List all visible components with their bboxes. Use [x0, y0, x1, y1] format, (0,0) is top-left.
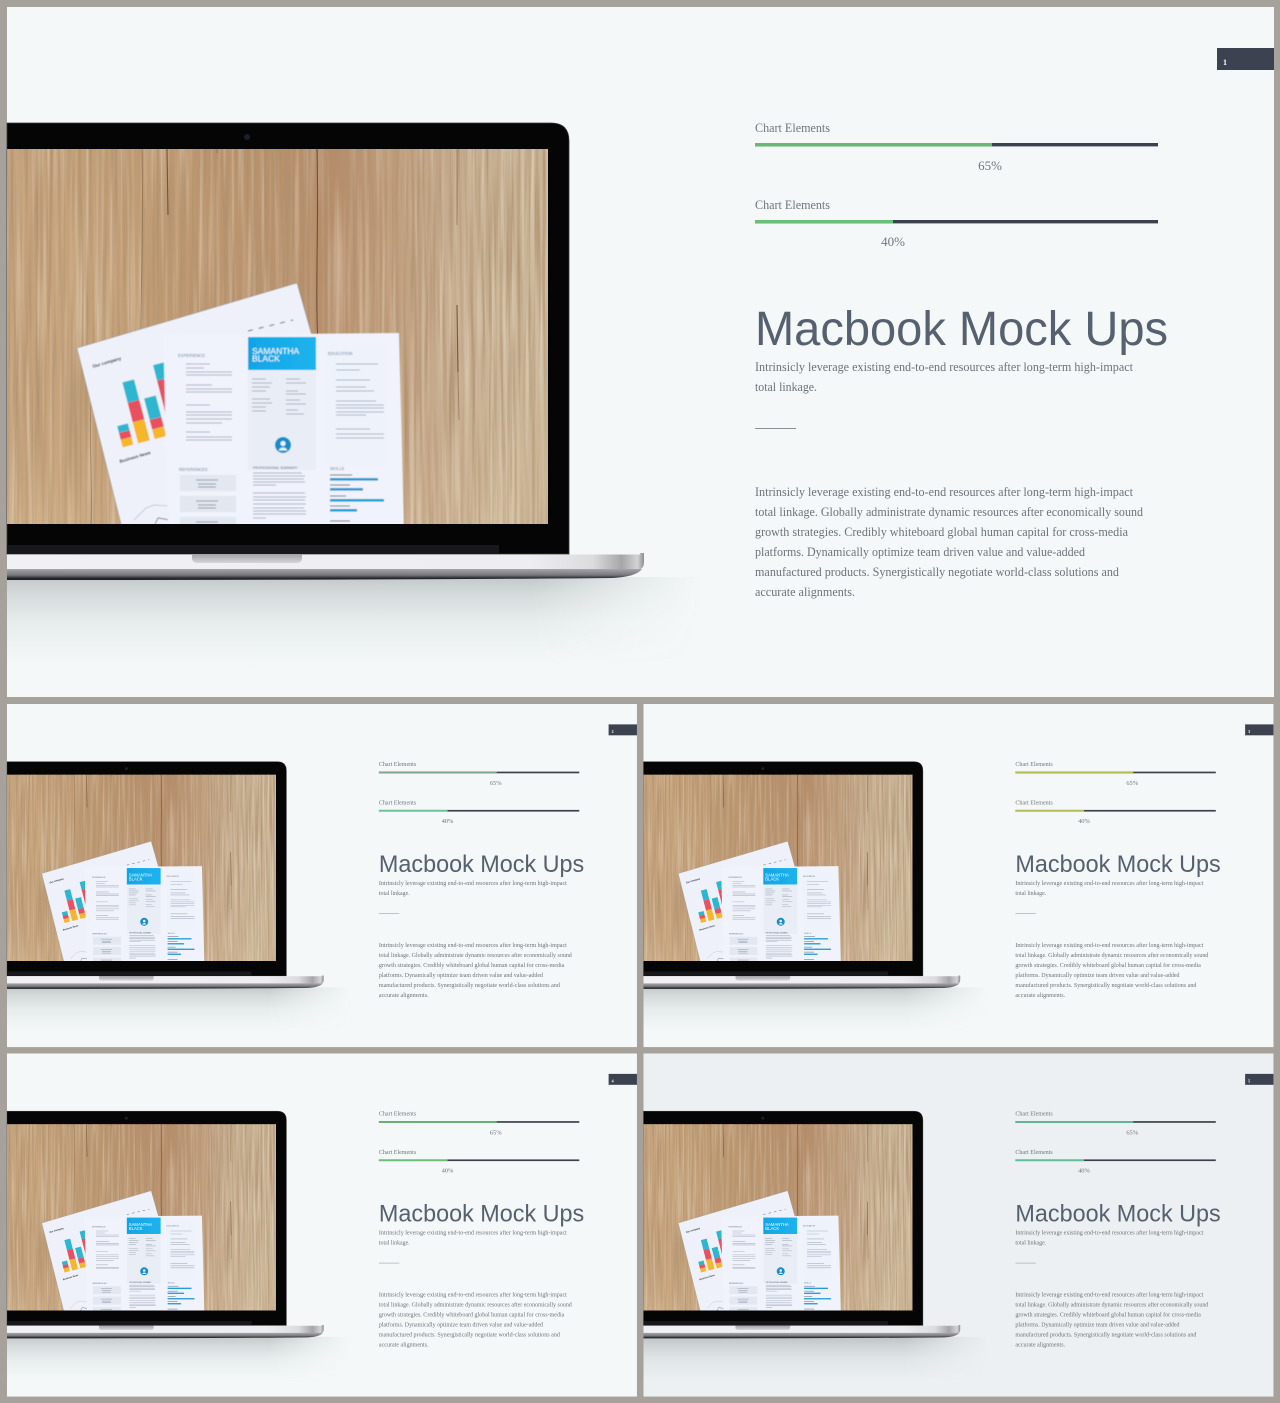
laptop mockup	[7, 123, 707, 667]
title: Macbook Mock Ups	[379, 851, 584, 878]
body text: manufactured products. Synergistically negotiate world-class solutions and	[1015, 1331, 1197, 1338]
chart element 1: 65%	[1126, 780, 1139, 787]
chart element 1: Chart Elements	[1015, 761, 1053, 768]
title: Macbook Mock Ups	[1015, 851, 1221, 878]
body text: accurate alignments.	[1015, 1341, 1066, 1348]
body text: platforms. Dynamically optimize team driven value and value-added	[755, 545, 1086, 559]
body text: manufactured products. Synergistically negotiate world-class solutions and	[379, 982, 561, 989]
chart element 1: Chart Elements	[379, 1111, 417, 1118]
chart element 2	[379, 1149, 579, 1174]
slide 5 background	[644, 1054, 1273, 1397]
slide 1: large main slide	[7, 7, 1274, 697]
slide 3 background	[644, 704, 1273, 1047]
subtitle	[379, 880, 567, 897]
subtitle: Intrinsicly leverage existing end-to-end resources after long-term high-impact	[1015, 880, 1204, 887]
subtitle: total linkage.	[1015, 890, 1047, 897]
slide number tag	[609, 724, 637, 735]
chart element 2	[1015, 1149, 1216, 1174]
back paper with charts: Business News	[119, 450, 152, 464]
front resume paper: EDUCATION	[328, 351, 352, 356]
body text: platforms. Dynamically optimize team driven value and value-added	[1015, 1321, 1180, 1328]
body text: growth strategies. Credibly whiteboard global human capital for cross-media	[379, 962, 565, 969]
body text	[1015, 942, 1209, 999]
body text: growth strategies. Credibly whiteboard global human capital for cross-media	[755, 525, 1128, 539]
front resume paper: BLACK	[252, 354, 280, 364]
chart element 2: 40%	[1078, 818, 1091, 825]
slide number tag	[609, 1074, 637, 1085]
slide 2 background	[7, 704, 637, 1047]
slide number tag: 5	[1248, 1078, 1250, 1083]
body text	[379, 942, 573, 999]
laptop mockup	[644, 1111, 992, 1382]
chart element 1: 65% progress bar	[755, 121, 1158, 173]
webcam	[244, 134, 250, 140]
chart element 2: Chart Elements	[379, 799, 417, 806]
resume text lines	[186, 364, 384, 518]
laptop shadow	[7, 577, 707, 667]
laptop lid	[7, 123, 569, 554]
resume header	[248, 337, 316, 370]
slide number tag	[1245, 1074, 1273, 1085]
subtitle	[1015, 1229, 1204, 1246]
laptop mockup	[7, 762, 355, 1032]
body text: growth strategies. Credibly whiteboard global human capital for cross-media	[1015, 962, 1201, 969]
chart element 2: 40% progress bar: 40%	[881, 234, 905, 249]
chart element 2: 40% progress bar	[755, 198, 1158, 249]
body text: manufactured products. Synergistically negotiate world-class solutions and	[379, 1331, 561, 1338]
stacked bar chart	[105, 362, 183, 447]
subtitle	[379, 1229, 567, 1246]
chart element 1: Chart Elements	[379, 761, 417, 768]
body text: accurate alignments.	[1015, 992, 1066, 999]
reference cards	[180, 475, 236, 491]
chart element 1	[1015, 761, 1216, 787]
slide number tag: 2	[612, 729, 614, 734]
chart element 1: 65% progress bar: 65%	[978, 158, 1002, 173]
body text: accurate alignments.	[755, 585, 855, 599]
chart element 2: Chart Elements	[379, 1149, 417, 1156]
subtitle: total linkage.	[379, 1239, 410, 1246]
slide 4 background	[7, 1054, 637, 1397]
body text: Intrinsicly leverage existing end-to-end resources after long-term high-impact	[755, 485, 1134, 499]
slide 5: small slide bottom right	[644, 1054, 1273, 1397]
body text: accurate alignments.	[379, 992, 429, 999]
chart element 1	[379, 1111, 579, 1137]
body text: total linkage. Globally administrate dynamic resources after economically sound	[1015, 1302, 1209, 1309]
chart element 1: 65%	[1126, 1130, 1139, 1137]
slide 4: small slide bottom left	[7, 1054, 637, 1397]
body text: total linkage. Globally administrate dynamic resources after economically sound	[1015, 952, 1209, 959]
lower bezel reflection	[7, 545, 499, 554]
body text: platforms. Dynamically optimize team driven value and value-added	[1015, 972, 1180, 979]
title: Macbook Mock Ups	[379, 1201, 584, 1228]
body text: Intrinsicly leverage existing end-to-end resources after long-term high-impact	[379, 1292, 567, 1299]
body text	[755, 485, 1144, 599]
chart element 2	[1015, 799, 1216, 825]
subtitle	[1015, 880, 1204, 897]
body text	[379, 1292, 573, 1348]
slide number tag: 1	[1223, 58, 1227, 67]
body text: platforms. Dynamically optimize team driven value and value-added	[379, 1321, 544, 1328]
laptop mockup	[7, 1111, 355, 1382]
chart element 1: 65% progress bar: Chart Elements	[755, 121, 830, 135]
subtitle: Intrinsicly leverage existing end-to-end resources after long-term high-impact	[379, 1229, 567, 1236]
front resume paper: EXPERIENCE	[178, 353, 205, 358]
body text: manufactured products. Synergistically negotiate world-class solutions and	[755, 565, 1120, 579]
chart element 1: 65%	[490, 780, 502, 787]
subtitle: Intrinsicly leverage existing end-to-end resources after long-term high-impact	[1015, 1229, 1204, 1236]
chart element 2: Chart Elements	[1015, 799, 1053, 806]
subtitle: total linkage.	[755, 380, 817, 394]
slide number tag: 4	[612, 1078, 614, 1083]
chart element 1: 65%	[490, 1130, 502, 1137]
laptop base	[7, 553, 644, 571]
chart element 1	[1015, 1111, 1216, 1137]
subtitle: Intrinsicly leverage existing end-to-end resources after long-term high-impact	[379, 880, 567, 887]
body text: total linkage. Globally administrate dynamic resources after economically sound	[379, 1302, 573, 1309]
back paper with charts: Our company	[92, 356, 122, 369]
slide number tag	[1245, 724, 1273, 735]
laptop mockup	[644, 762, 992, 1032]
subtitle: total linkage.	[379, 890, 410, 897]
front resume paper: REFERENCES	[179, 467, 208, 472]
front resume paper: SAMANTHA	[252, 346, 300, 356]
chart element 2: 40%	[442, 1167, 454, 1174]
chart element 2: 40% progress bar: Chart Elements	[755, 198, 830, 212]
body text: Intrinsicly leverage existing end-to-end resources after long-term high-impact	[379, 942, 567, 949]
body text: growth strategies. Credibly whiteboard global human capital for cross-media	[1015, 1312, 1201, 1319]
slide 2: small slide top left	[7, 704, 637, 1047]
chart element 2	[379, 799, 579, 825]
screen: wooden desk photo	[7, 149, 548, 560]
slide 1 background	[7, 7, 1274, 697]
chart element 1: Chart Elements	[1015, 1111, 1053, 1118]
title: Macbook Mock Ups	[1015, 1201, 1221, 1228]
body text: platforms. Dynamically optimize team driven value and value-added	[379, 972, 544, 979]
slide 3: small slide top right	[644, 704, 1273, 1047]
laptop base front edge	[7, 569, 642, 580]
subtitle: Intrinsicly leverage existing end-to-end resources after long-term high-impact	[755, 360, 1134, 374]
body text: growth strategies. Credibly whiteboard global human capital for cross-media	[379, 1312, 565, 1319]
chart element 2: 40%	[442, 818, 454, 825]
body text	[1015, 1292, 1209, 1348]
trackpad notch	[192, 554, 302, 563]
front resume paper	[163, 333, 404, 530]
slide number tag: 3	[1248, 729, 1250, 734]
skills bars	[330, 478, 384, 512]
body text: Intrinsicly leverage existing end-to-end resources after long-term high-impact	[1015, 1292, 1204, 1299]
chart element 2: Chart Elements	[1015, 1149, 1053, 1156]
body text: total linkage. Globally administrate dynamic resources after economically sound	[755, 505, 1144, 519]
front resume paper: SKILLS	[330, 466, 344, 471]
title: Macbook Mock Ups	[755, 303, 1168, 356]
subtitle: total linkage.	[1015, 1239, 1047, 1246]
icon: profile circle	[275, 437, 291, 453]
chart element 2: 40%	[1078, 1167, 1091, 1174]
subtitle	[755, 360, 1134, 394]
front resume paper: PROFESSIONAL SUMMARY	[253, 466, 298, 470]
back paper with charts	[77, 283, 330, 560]
body text: manufactured products. Synergistically negotiate world-class solutions and	[1015, 982, 1197, 989]
slide number tag	[1217, 48, 1274, 70]
body text: accurate alignments.	[379, 1341, 429, 1348]
body text: total linkage. Globally administrate dynamic resources after economically sound	[379, 952, 573, 959]
body text: Intrinsicly leverage existing end-to-end resources after long-term high-impact	[1015, 942, 1204, 949]
chart element 1	[379, 761, 579, 787]
